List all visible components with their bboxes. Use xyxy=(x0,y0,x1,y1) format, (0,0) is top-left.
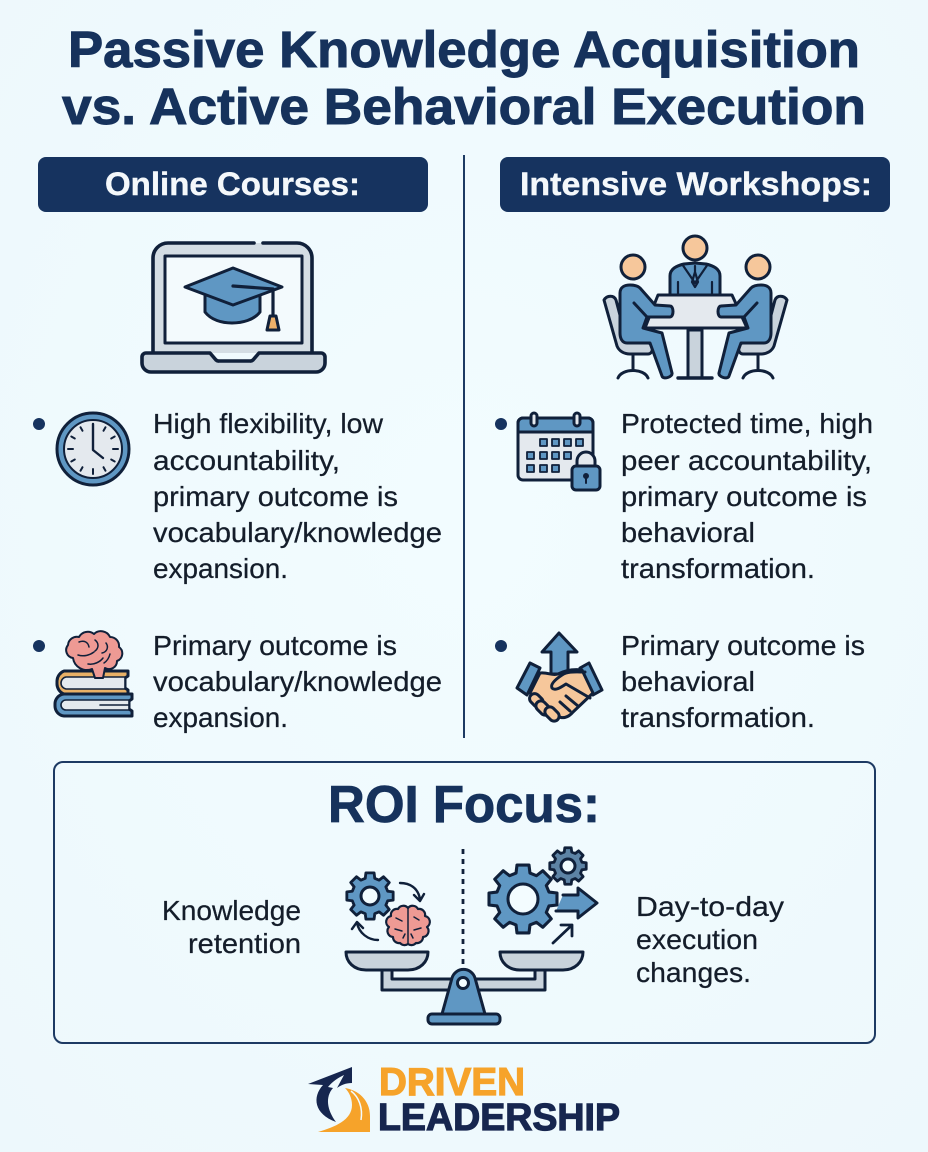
text: execution changes: changes. xyxy=(636,957,751,988)
text: flexibility: expansion. xyxy=(153,553,288,584)
text: protected time: behavioral xyxy=(621,517,755,548)
small gear xyxy=(550,848,586,884)
text: protected time: primary outcome is xyxy=(621,481,867,512)
cycle arrows xyxy=(352,883,424,940)
arrow up-right xyxy=(553,925,572,943)
title xyxy=(62,21,866,135)
title: Passive Knowledge Acquisition xyxy=(68,21,860,78)
panel: roi focus xyxy=(54,762,875,1043)
text: vocabulary outcome: expansion. xyxy=(153,702,288,733)
heading: intensive workshops: Intensive Workshops: xyxy=(520,166,872,202)
text: execution changes xyxy=(636,891,784,988)
bullet 4 xyxy=(495,640,507,652)
text: vocabulary outcome: Primary outcome is xyxy=(153,630,397,661)
text: execution changes: execution xyxy=(636,924,758,955)
bullet 2 xyxy=(33,640,45,652)
text: flexibility xyxy=(153,408,442,584)
heading: online courses: Online Courses: xyxy=(105,166,360,202)
text: vocabulary outcome xyxy=(153,630,442,733)
bullet 1 xyxy=(33,418,45,430)
text: protected time xyxy=(621,408,873,584)
text: protected time: peer accountability, xyxy=(621,445,872,476)
chairs xyxy=(604,296,652,378)
panel: online courses xyxy=(33,157,442,733)
text: knowledge retention xyxy=(162,895,301,959)
text: behavioral outcome xyxy=(621,630,865,733)
icon: brain on books xyxy=(55,631,132,716)
logo: driven leadership xyxy=(308,1061,620,1139)
text: knowledge retention: retention xyxy=(188,928,301,959)
heading: roi focus: ROI Focus: xyxy=(328,776,600,834)
left brain xyxy=(386,906,430,945)
title: vs. Active Behavioral Execution xyxy=(62,78,866,135)
center divider xyxy=(463,155,465,738)
icon: people around table xyxy=(604,236,787,378)
heading: intensive workshops xyxy=(500,157,890,212)
text: vocabulary outcome: vocabulary/knowledge xyxy=(153,666,442,697)
heading: online courses xyxy=(38,157,428,212)
panel: intensive workshops xyxy=(495,157,890,733)
text: flexibility: primary outcome is xyxy=(153,481,398,512)
icon: laptop with graduation cap xyxy=(142,243,325,372)
text: behavioral outcome: transformation. xyxy=(621,702,815,733)
left gear xyxy=(347,873,393,919)
text: behavioral outcome: Primary outcome is xyxy=(621,630,865,661)
logo: driven leadership: DRIVEN xyxy=(379,1061,525,1104)
text: behavioral outcome: behavioral xyxy=(621,666,755,697)
icon: clock xyxy=(57,413,129,485)
text: flexibility: High flexibility, low xyxy=(153,408,384,439)
logo: driven leadership: LEADERSHIP xyxy=(378,1097,620,1139)
text: protected time: transformation. xyxy=(621,553,815,584)
logo mark xyxy=(308,1067,370,1132)
bullet 3 xyxy=(495,418,507,430)
text: protected time: Protected time, high xyxy=(621,408,873,439)
seated person left xyxy=(620,255,673,378)
icon: balance scale with gears xyxy=(346,848,597,1024)
right gear xyxy=(489,865,557,933)
text: execution changes: Day-to-day xyxy=(636,891,784,922)
icon: handshake with arrow xyxy=(517,633,602,723)
text: knowledge retention: Knowledge xyxy=(162,895,301,926)
dotted line xyxy=(462,849,464,964)
icon: calendar with lock xyxy=(518,413,600,490)
text: flexibility: vocabulary/knowledge xyxy=(153,517,442,548)
arrow right xyxy=(556,888,597,918)
text: flexibility: accountability, xyxy=(153,445,340,476)
